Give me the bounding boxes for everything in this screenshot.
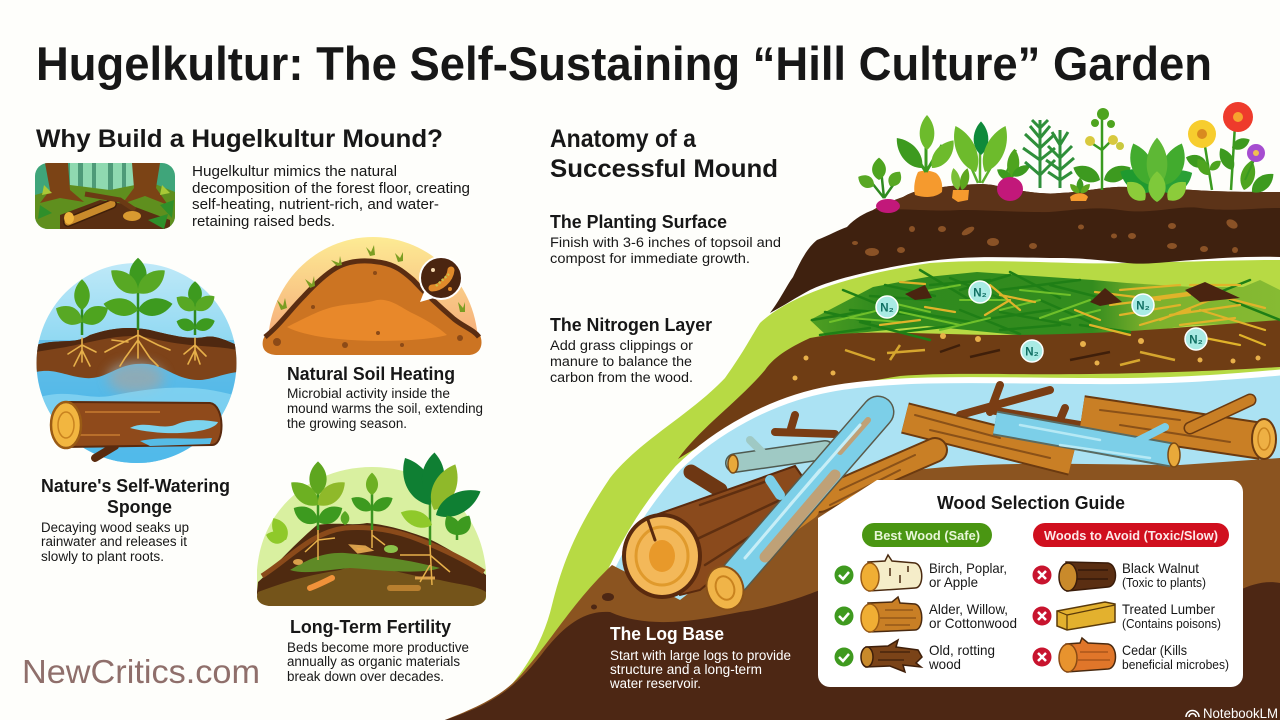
N2 badges: N₂ bbox=[1025, 346, 1039, 358]
text: self-watering sponge: slowly to plant roots. bbox=[41, 549, 164, 564]
N2 badges: N₂ bbox=[1189, 334, 1203, 346]
log: big brown with end grain bbox=[622, 466, 815, 599]
text: the log base: Start with large logs to provide bbox=[610, 648, 791, 663]
icon: microbe bubble bbox=[420, 257, 462, 302]
mound diagram bbox=[445, 184, 1280, 720]
text: long-term fertility bbox=[287, 617, 469, 684]
log: long orange center bbox=[905, 415, 1072, 460]
text: planting surface: Finish with 3-6 inches of topsoil and bbox=[550, 235, 781, 250]
pill: best wood: Best Wood (Safe) bbox=[874, 528, 980, 543]
text: planting surface bbox=[550, 212, 781, 266]
card background bbox=[818, 480, 1243, 687]
row: alder bbox=[834, 597, 1017, 632]
layer: nitrogen soil bbox=[678, 320, 1280, 459]
heading: anatomy: Successful Mound bbox=[550, 155, 778, 183]
plant: small carrot bbox=[949, 167, 972, 202]
panel: why build bbox=[35, 125, 470, 230]
log: blue lying bbox=[995, 423, 1180, 467]
row: rotting: wood bbox=[928, 656, 961, 672]
plant: leafy chard bbox=[947, 121, 1014, 183]
text: self-watering sponge bbox=[41, 476, 230, 564]
plant: red flower bbox=[1215, 102, 1278, 197]
plant: lettuce bbox=[1116, 138, 1197, 205]
layer: base dark soil bbox=[445, 582, 1280, 720]
plant: purple flower bbox=[1245, 144, 1265, 180]
row: rotting bbox=[834, 640, 995, 672]
text: the log base: water reservoir. bbox=[609, 676, 701, 691]
icon: water-filled log bbox=[51, 402, 222, 458]
row: cedar: beneficial microbes) bbox=[1122, 658, 1229, 672]
text: intro paragraph: self-heating, nutrient-rich, and water- bbox=[192, 197, 439, 213]
N2 badges: N₂ bbox=[880, 302, 894, 314]
text: nitrogen layer bbox=[550, 315, 712, 385]
row: black walnut bbox=[1032, 560, 1206, 591]
row: black walnut: Black Walnut bbox=[1122, 560, 1199, 576]
log: dark top branches bbox=[775, 385, 1110, 434]
plant: yellow flower bbox=[1184, 120, 1223, 190]
row: treated lumber: (Contains poisons) bbox=[1122, 617, 1221, 631]
plants on mound bbox=[855, 102, 1278, 213]
heading: why build: Why Build a Hugelkultur Mound? bbox=[36, 125, 443, 153]
illustration: self-watering sponge bbox=[36, 258, 237, 464]
layer: grass field bbox=[810, 272, 1280, 336]
layer: water blue band bbox=[610, 372, 1280, 640]
logs bbox=[622, 385, 1276, 615]
illustration: long-term fertility bbox=[257, 452, 486, 606]
log: large blue diagonal bbox=[701, 412, 878, 615]
panel: anatomy text bbox=[550, 125, 781, 385]
text: natural soil heating bbox=[287, 364, 483, 431]
row: birch: or Apple bbox=[929, 574, 978, 590]
roots bbox=[305, 530, 450, 585]
text: planting surface: The Planting Surface bbox=[550, 212, 727, 232]
roots bbox=[68, 328, 206, 366]
text: the log base bbox=[609, 624, 791, 691]
text: planting surface: compost for immediate growth. bbox=[550, 251, 750, 266]
N2 badges: N₂ bbox=[973, 288, 987, 300]
text: nitrogen layer: carbon from the wood. bbox=[550, 370, 693, 385]
soil layers bbox=[257, 523, 486, 606]
icon: forest floor thumbnail bbox=[35, 163, 175, 229]
text: natural soil heating: mound warms the soil, extending bbox=[287, 401, 483, 416]
text: the log base: The Log Base bbox=[610, 624, 724, 644]
soil flecks bbox=[792, 333, 1260, 380]
row: rotting: Old, rotting bbox=[929, 642, 995, 658]
plant: beet bbox=[995, 148, 1032, 201]
layer: topsoil bbox=[770, 184, 1280, 313]
dark mulch lumps bbox=[905, 282, 1240, 306]
log: right orange with branch bbox=[1082, 400, 1276, 459]
heading: anatomy: Anatomy of a bbox=[550, 125, 697, 153]
layer: green band bbox=[505, 260, 1280, 692]
pill: woods to avoid bbox=[1033, 523, 1229, 547]
text: intro paragraph: decomposition of the forest floor, creating bbox=[192, 181, 470, 197]
plant: carrot tiny bbox=[1068, 178, 1092, 201]
heading: anatomy bbox=[550, 125, 778, 183]
row: cedar bbox=[1032, 638, 1229, 672]
text: self-watering sponge: Nature's Self-Watering bbox=[41, 476, 230, 496]
text: intro paragraph: retaining raised beds. bbox=[192, 214, 335, 230]
row: alder: Alder, Willow, bbox=[929, 601, 1008, 617]
watermark: NewCritics.com: NewCritics.com bbox=[22, 653, 260, 690]
plant: rosemary bbox=[1023, 120, 1074, 188]
row: cedar: Cedar (Kills bbox=[1122, 642, 1187, 658]
text: nitrogen layer: The Nitrogen Layer bbox=[550, 315, 712, 335]
N2 badges bbox=[876, 281, 1207, 362]
plants bbox=[265, 452, 485, 546]
text: nitrogen layer: manure to balance the bbox=[550, 354, 692, 369]
text: long-term fertility: break down over decades. bbox=[287, 669, 444, 684]
text: natural soil heating: the growing season. bbox=[287, 416, 407, 431]
log: small pale-blue bbox=[728, 440, 825, 473]
row: birch: Birch, Poplar, bbox=[929, 560, 1007, 576]
title: Hugelkultur: The Self-Sustaining “Hill Culture” Garden bbox=[36, 37, 1212, 90]
log: orange diagonal bbox=[775, 450, 935, 535]
row: alder: or Cottonwood bbox=[929, 615, 1017, 631]
text: self-watering sponge: rainwater and releases it bbox=[41, 534, 187, 549]
plant: radish left bbox=[855, 158, 905, 213]
row: treated lumber: Treated Lumber bbox=[1122, 601, 1215, 617]
pill: woods to avoid: Woods to Avoid (Toxic/Slow) bbox=[1044, 528, 1218, 543]
text: intro paragraph bbox=[192, 164, 470, 230]
panel: wood selection guide bbox=[818, 480, 1243, 687]
soil pebbles bbox=[591, 593, 614, 610]
text: self-watering sponge: Sponge bbox=[107, 497, 172, 517]
grass clippings bbox=[812, 270, 1280, 345]
illustration: natural soil heating bbox=[263, 237, 482, 355]
heading: wood selection guide: Wood Selection Guide bbox=[937, 493, 1125, 513]
layer: base light soil bbox=[445, 458, 1280, 720]
text: nitrogen layer: Add grass clippings or bbox=[550, 338, 694, 353]
text: natural soil heating: Microbial activity inside the bbox=[287, 386, 450, 401]
plant: flowering herb bbox=[1070, 108, 1134, 190]
row: treated lumber bbox=[1032, 601, 1221, 631]
text: natural soil heating: Natural Soil Heating bbox=[287, 364, 455, 384]
text: long-term fertility: Long-Term Fertility bbox=[290, 617, 451, 637]
N2 badges: N₂ bbox=[1136, 300, 1150, 312]
plants bbox=[52, 258, 218, 335]
row: birch bbox=[834, 555, 1007, 591]
text: long-term fertility: Beds become more productive bbox=[287, 640, 469, 655]
text: long-term fertility: annually as organic materials bbox=[287, 654, 460, 669]
pill: best wood bbox=[862, 523, 992, 547]
plant: carrot bbox=[891, 115, 960, 197]
row: black walnut: (Toxic to plants) bbox=[1122, 576, 1206, 590]
text: intro paragraph: Hugelkultur mimics the natural bbox=[192, 164, 397, 180]
text: self-watering sponge: Decaying wood seaks up bbox=[41, 520, 189, 535]
text: the log base: structure and a long-term bbox=[610, 662, 762, 677]
